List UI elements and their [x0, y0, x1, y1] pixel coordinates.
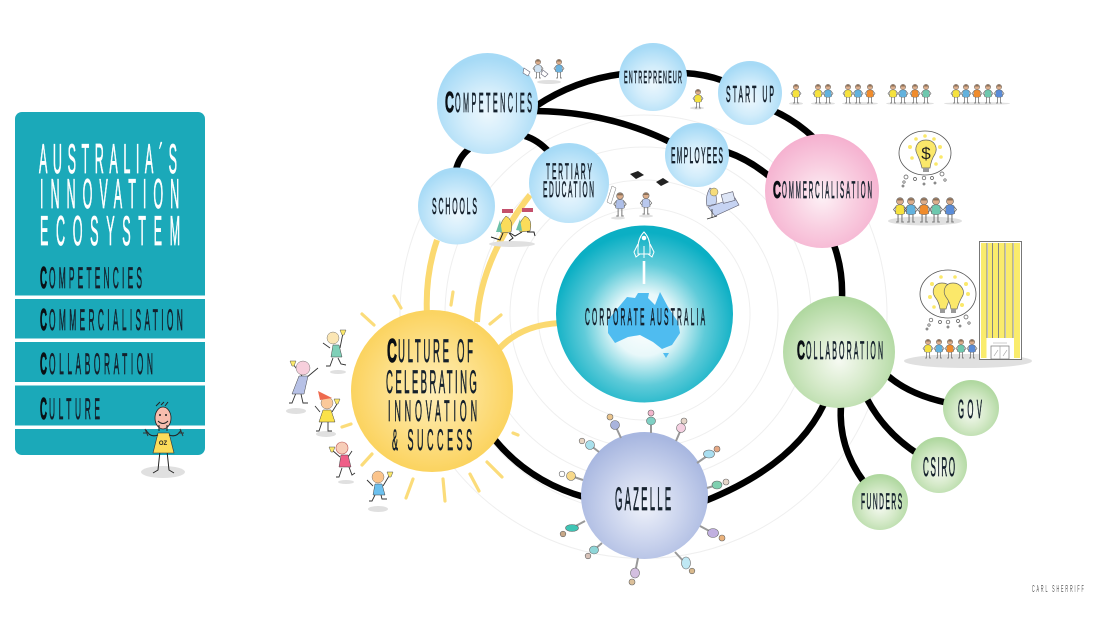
- title: Australia's Innovation Ecosystem: ECOSYSTEM: [40, 207, 180, 254]
- node: Funders: [852, 474, 908, 530]
- concentric orbit rings: [400, 115, 887, 558]
- icon: graduates: [607, 171, 669, 220]
- icon: running figures: [523, 59, 564, 84]
- node: Collaboration: C: [797, 335, 805, 365]
- list: four Cs: OMPETENCIES: [49, 261, 142, 295]
- node: Employees: EMPLOYEES: [671, 144, 723, 168]
- node: Competencies: OMPETENCIES: [455, 87, 532, 119]
- list: four Cs: [40, 260, 183, 426]
- icon: sun rays: [342, 292, 518, 501]
- list: four Cs: OLLABORATION: [49, 347, 153, 381]
- node: Schools: SCHOOLS: [432, 194, 477, 219]
- node: Culture of celebrating: ULTURE OF: [398, 335, 473, 370]
- node: Culture of celebrating: [351, 310, 513, 472]
- node: Gov: GOV: [958, 396, 982, 425]
- node: Culture of celebrating: INNOVATION: [388, 394, 477, 428]
- list: four Cs: ULTURE: [49, 392, 100, 426]
- list: four Cs: C: [40, 391, 47, 426]
- credit: CARL SHERRIFF: [1032, 583, 1084, 595]
- title: Australia's Innovation Ecosystem: INNOVATION: [40, 170, 179, 217]
- node: Competencies: C: [445, 87, 454, 119]
- node: CSIRO: CSIRO: [923, 453, 955, 483]
- node: Tertiary Education: TERTIARY: [546, 160, 592, 184]
- list: four Cs: OMMERCIALISATION: [49, 303, 183, 337]
- node: Commercialisation: OMMERCIALISATION: [782, 176, 872, 203]
- node: Culture of celebrating: C: [387, 332, 397, 369]
- icon: entrepreneur figure: [690, 89, 704, 110]
- node: Culture of celebrating: & SUCCESS: [392, 423, 472, 457]
- node: Corporate Australia: CORPORATE AUSTRALIA: [585, 303, 705, 330]
- node: Entrepreneur: [619, 43, 687, 111]
- icon: commercialisation idea group: [888, 131, 962, 226]
- node: Commercialisation: C: [773, 177, 781, 204]
- node: Collaboration: [783, 296, 895, 408]
- node: Schools: [418, 168, 495, 244]
- node: Commercialisation: [765, 134, 879, 248]
- list: four Cs: C: [40, 302, 47, 337]
- icon: commercialisation idea group: $: [921, 144, 931, 163]
- icon: rocket: [634, 232, 654, 284]
- node: Tertiary Education: EDUCATION: [543, 178, 594, 202]
- icon: employee at desk: [706, 188, 739, 219]
- node: Funders: FUNDERS: [861, 490, 902, 514]
- black connector arcs: [456, 73, 948, 501]
- title: Australia's Innovation Ecosystem: [39, 135, 180, 254]
- node: Gov: [943, 380, 999, 436]
- node: CSIRO: [911, 437, 967, 493]
- icon: Oz character: [141, 402, 185, 478]
- node: Collaboration: OLLABORATION: [806, 336, 883, 364]
- node: Gazelle: [581, 432, 708, 559]
- list: four Cs: C: [40, 260, 47, 295]
- icon: people on gazelle: [559, 410, 729, 585]
- icon: school children: [489, 208, 535, 247]
- node: Entrepreneur: ENTREPRENEUR: [624, 67, 682, 87]
- yellow connector arcs: [427, 195, 560, 350]
- node: Gazelle: GAZELLE: [615, 483, 671, 518]
- node: Corporate Australia: [556, 226, 733, 402]
- node: Start Up: START UP: [726, 82, 774, 107]
- icon: celebrating people: [286, 330, 393, 512]
- title: Australia's Innovation Ecosystem: AUSTRALIA´S: [39, 135, 177, 182]
- icon: tower: [980, 242, 1022, 360]
- node: Employees: [665, 123, 729, 187]
- node: Start Up: [718, 61, 782, 125]
- node: Competencies: [437, 53, 538, 154]
- node: Tertiary Education: [529, 143, 609, 223]
- panel: title and four Cs: [15, 112, 205, 455]
- icon: start up teams: [789, 84, 1010, 105]
- icon: Australia map: [608, 292, 680, 358]
- list: four Cs: C: [40, 346, 47, 381]
- icon: Oz character: OZ: [159, 441, 167, 447]
- icon: collaboration group and tower: [904, 242, 1032, 368]
- node: Culture of celebrating: CELEBRATING: [386, 366, 477, 401]
